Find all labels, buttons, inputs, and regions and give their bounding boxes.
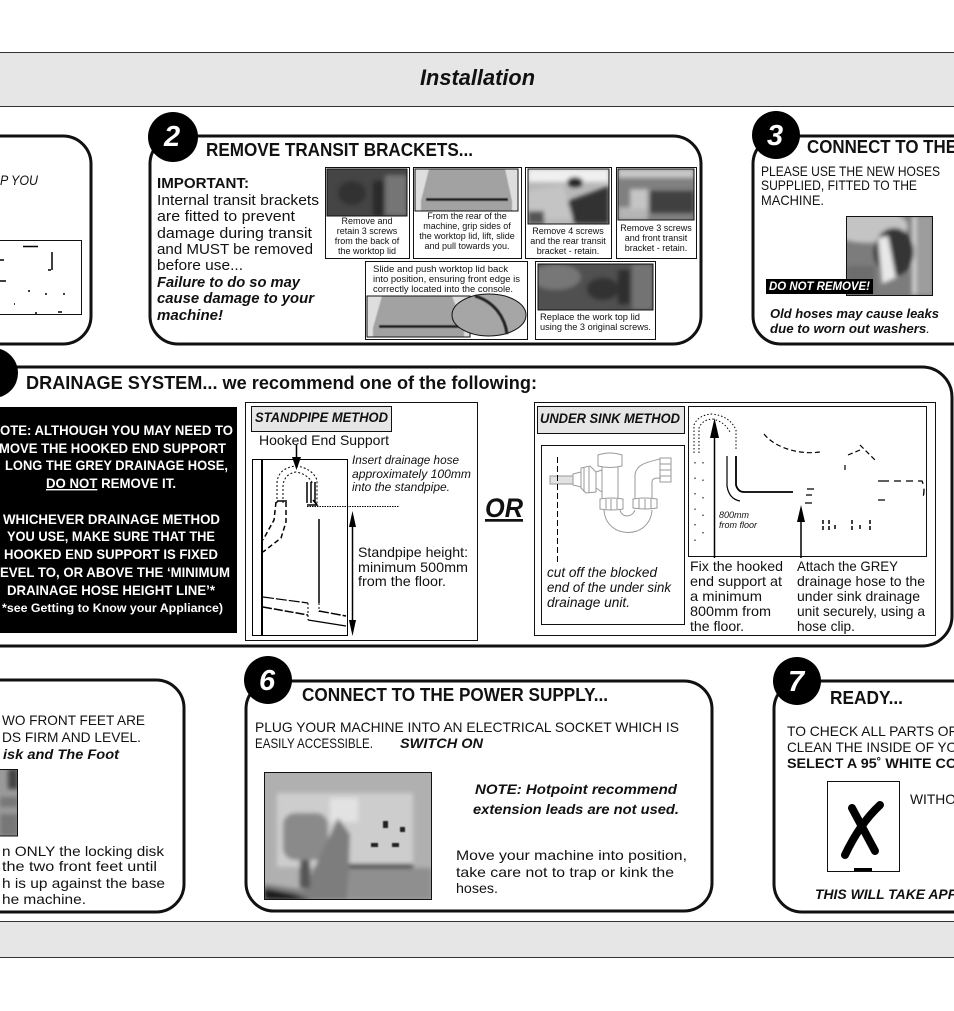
text: insert hose: approximately 100mm xyxy=(352,467,471,481)
step badge 2 xyxy=(148,112,198,162)
diagram: standpipe xyxy=(252,459,348,636)
heading: REMOVE TRANSIT BRACKETS... xyxy=(206,140,473,160)
text block: new hoses: MACHINE. xyxy=(761,192,824,208)
callout: black note: *see Getting to Know your Appliance) xyxy=(2,603,223,615)
photo: foot xyxy=(0,769,18,836)
arrow: fix point xyxy=(710,418,719,558)
arrow head xyxy=(292,457,301,470)
label: under sink method: UNDER SINK METHOD xyxy=(540,410,680,426)
heading: READY... xyxy=(830,688,903,708)
text block: move machine: hoses. xyxy=(456,880,498,896)
text block: important: Failure to do so may xyxy=(157,274,301,291)
text: attach the grey hose: under sink drainage xyxy=(797,588,920,604)
title: Installation xyxy=(420,65,535,90)
text: fix the hooked end: Fix the hooked xyxy=(690,558,783,574)
panel: step 6 power supply xyxy=(244,656,712,911)
photo card 4 xyxy=(616,168,696,258)
panel: step 1 (cropped) xyxy=(0,136,91,344)
text block: check parts: SELECT A 95˚ WHITE CO xyxy=(787,755,954,771)
text block: important: and MUST be removed xyxy=(157,241,313,258)
text: standpipe height: Standpipe height: xyxy=(358,544,468,560)
panel: step 5 feet (cropped) xyxy=(0,680,184,912)
text block: locking disk: the two front feet until xyxy=(2,858,157,874)
text block: new hoses: SUPPLIED, FITTED TO THE xyxy=(761,177,917,193)
label: OR: OR xyxy=(485,493,523,523)
photo card 1: the worktop lid xyxy=(338,246,396,256)
photo card 3: and the rear transit xyxy=(530,236,606,246)
photo card 5: into position, ensuring front edge is xyxy=(373,274,521,284)
text: insert hose xyxy=(352,453,471,494)
text block: move machine xyxy=(456,847,687,896)
text block: old hoses warning: Old hoses may cause leaks xyxy=(770,306,939,321)
text: fix the hooked end: end support at xyxy=(690,573,782,589)
text: fix the hooked end: 800mm from xyxy=(690,603,771,619)
photo card 6: using the 3 original screws. xyxy=(540,322,651,332)
photo card 5: correctly located into the console. xyxy=(373,284,513,294)
cut line xyxy=(556,457,558,565)
text block: front feet xyxy=(2,712,145,762)
text: fix the hooked end: the floor. xyxy=(690,618,744,634)
panel: step 7 ready xyxy=(773,657,954,912)
step badge 6 xyxy=(244,656,292,704)
text: 800mm from floor: 800mm xyxy=(719,510,750,520)
heading: DRAINAGE SYSTEM... we recommend one of the following: xyxy=(26,373,537,393)
bottom band xyxy=(0,922,954,958)
photo card 3: bracket - retain. xyxy=(537,246,599,256)
panel: drainage system xyxy=(0,348,952,646)
callout: black note: EVEL TO, OR ABOVE THE ‘MINIMUM xyxy=(0,564,230,580)
label: standpipe method: STANDPIPE METHOD xyxy=(255,409,388,425)
title band xyxy=(0,52,954,106)
diagram: trap xyxy=(550,453,671,532)
text block: check parts xyxy=(787,723,954,771)
label: hooked end support: Hooked End Support xyxy=(259,432,389,448)
photo card 1: retain 3 screws xyxy=(337,226,398,236)
step badge 6: 6 xyxy=(259,665,276,697)
photo card 2 xyxy=(414,168,522,258)
step badge 4 (cropped) xyxy=(0,348,18,398)
magnified detail xyxy=(452,294,526,336)
text block: important: cause damage to your xyxy=(157,290,315,307)
callout: black note: DO NOT REMOVE IT. xyxy=(46,475,176,491)
arrow: standpipe height xyxy=(349,511,356,636)
text block: important: are fitted to prevent xyxy=(157,208,296,225)
photo card 4: and front transit xyxy=(625,233,688,243)
heading: CONNECT TO THE POWER SUPPLY... xyxy=(302,685,608,705)
callout: black note: OTE: ALTHOUGH YOU MAY NEED TO xyxy=(0,422,233,438)
text block: old hoses warning: due to worn out washers. xyxy=(770,321,930,336)
text: attach the grey hose xyxy=(797,558,925,634)
text: attach the grey hose: hose clip. xyxy=(797,618,855,634)
callout: black note: LONG THE GREY DRAINAGE HOSE, xyxy=(5,457,228,473)
text: duration: THIS WILL TAKE APP xyxy=(815,886,954,902)
photo card 2: machine, grip sides of xyxy=(423,221,511,231)
text block: plug in: SWITCH ON xyxy=(400,735,484,751)
photo card 2: and pull towards you. xyxy=(424,241,510,251)
callout: black note: DRAINAGE HOSE HEIGHT LINE’* xyxy=(7,582,216,598)
note: extension leads: NOTE: Hotpoint recommend xyxy=(475,781,677,797)
text: insert hose: Insert drainage hose xyxy=(352,453,459,467)
photo card 6 xyxy=(531,262,656,340)
text: cut off: cut off the blocked xyxy=(547,565,657,580)
panel: under sink method xyxy=(534,402,936,636)
text block: old hoses warning xyxy=(770,306,939,336)
text block: locking disk: n ONLY the locking disk xyxy=(2,843,165,859)
photo card 6: Replace the work top lid xyxy=(540,312,640,322)
photo card 1: Remove and xyxy=(341,216,393,226)
text: cut off: end of the under sink xyxy=(547,580,672,595)
text block: new hoses xyxy=(761,163,940,208)
note: extension leads: extension leads are not used. xyxy=(473,801,679,817)
photo card 1: from the back of xyxy=(335,236,400,246)
photo card 2: From the rear of the xyxy=(427,211,507,221)
photo card 1 xyxy=(326,168,410,258)
step badge 3: 3 xyxy=(767,120,783,152)
note: extension leads xyxy=(473,781,679,817)
panel: standpipe method xyxy=(246,402,478,640)
text: attach the grey hose: drainage hose to the xyxy=(797,573,925,589)
label: standpipe method xyxy=(252,406,392,432)
arrow: hooked support pointer xyxy=(296,445,298,458)
diagram: under sink hose xyxy=(688,406,926,556)
text block: plug in: EASILY ACCESSIBLE. xyxy=(255,735,373,751)
text block: plug in: PLUG YOUR MACHINE INTO AN ELECTRICAL SOCKET WHICH IS xyxy=(255,719,679,735)
text block: important: IMPORTANT: xyxy=(157,176,249,192)
text block: important: machine! xyxy=(157,307,223,324)
text block: move machine: take care not to trap or kink the xyxy=(456,864,674,880)
photo card 5 xyxy=(366,262,528,340)
text block: important: Internal transit brackets xyxy=(157,192,319,209)
photo card 3: Remove 4 screws xyxy=(532,226,604,236)
text block: front feet: WO FRONT FEET ARE xyxy=(2,712,145,728)
text: attach the grey hose: unit securely, using a xyxy=(797,603,925,619)
text: step 1 fragment: P YOU xyxy=(0,172,39,188)
panel: step 3 connect hoses xyxy=(752,111,954,344)
text: cut off: drainage unit. xyxy=(547,595,630,610)
photo card 4: Remove 3 screws xyxy=(620,223,692,233)
text block: front feet: DS FIRM AND LEVEL. xyxy=(2,729,141,745)
text: cut off xyxy=(547,565,672,610)
photo card 2: the worktop lid, lift, slide xyxy=(419,231,515,241)
text block: important: damage during transit xyxy=(157,225,313,242)
step badge 2: 2 xyxy=(163,121,180,153)
text: standpipe height xyxy=(358,544,468,589)
photo card 5: Slide and push worktop lid back xyxy=(373,264,509,274)
text: standpipe height: from the floor. xyxy=(358,573,446,589)
callout: black note: MOVE THE HOOKED END SUPPORT xyxy=(0,440,226,456)
text: 800mm from floor xyxy=(719,510,758,530)
step badge 7 xyxy=(773,657,821,705)
callout: black note: WHICHEVER DRAINAGE METHOD xyxy=(3,511,220,527)
icon: no detergent X xyxy=(828,782,900,872)
photo card 4: bracket - retain. xyxy=(625,243,687,253)
step badge 7: 7 xyxy=(788,666,806,698)
text: standpipe height: minimum 500mm xyxy=(358,559,468,575)
arrow: attach point xyxy=(797,505,805,558)
text: attach the grey hose: Attach the GREY xyxy=(797,558,899,574)
diagram: step 1 xyxy=(0,240,82,314)
label: do not remove: DO NOT REMOVE! xyxy=(769,279,870,293)
text block: important xyxy=(157,176,319,324)
text block: front feet: isk and The Foot xyxy=(3,746,120,762)
callout: black note: YOU USE, MAKE SURE THAT THE xyxy=(7,528,215,544)
text: fix the hooked end: a minimum xyxy=(690,588,762,604)
callout: black note: HOOKED END SUPPORT IS FIXED xyxy=(4,546,218,562)
text block: important: before use... xyxy=(157,257,243,274)
photo card 3 xyxy=(526,168,612,258)
photo: hose xyxy=(828,209,933,296)
dotted level line xyxy=(307,506,399,508)
text: 800mm from floor: from floor xyxy=(719,520,758,530)
callout: black note xyxy=(0,407,237,633)
text block: locking disk xyxy=(2,843,165,907)
text block: locking disk: he machine. xyxy=(2,891,86,907)
panel: step 2 remove transit brackets xyxy=(148,112,701,344)
text block: plug in xyxy=(255,719,679,751)
text block: locking disk: h is up against the base xyxy=(2,875,165,891)
step badge 3 xyxy=(752,111,800,159)
photo: socket xyxy=(264,772,432,900)
text: fix the hooked end xyxy=(690,558,783,634)
label: under sink method xyxy=(538,406,684,434)
text: insert hose: into the standpipe. xyxy=(352,480,450,494)
box: drainage unit xyxy=(542,446,684,624)
text block: move machine: Move your machine into position, xyxy=(456,847,687,863)
